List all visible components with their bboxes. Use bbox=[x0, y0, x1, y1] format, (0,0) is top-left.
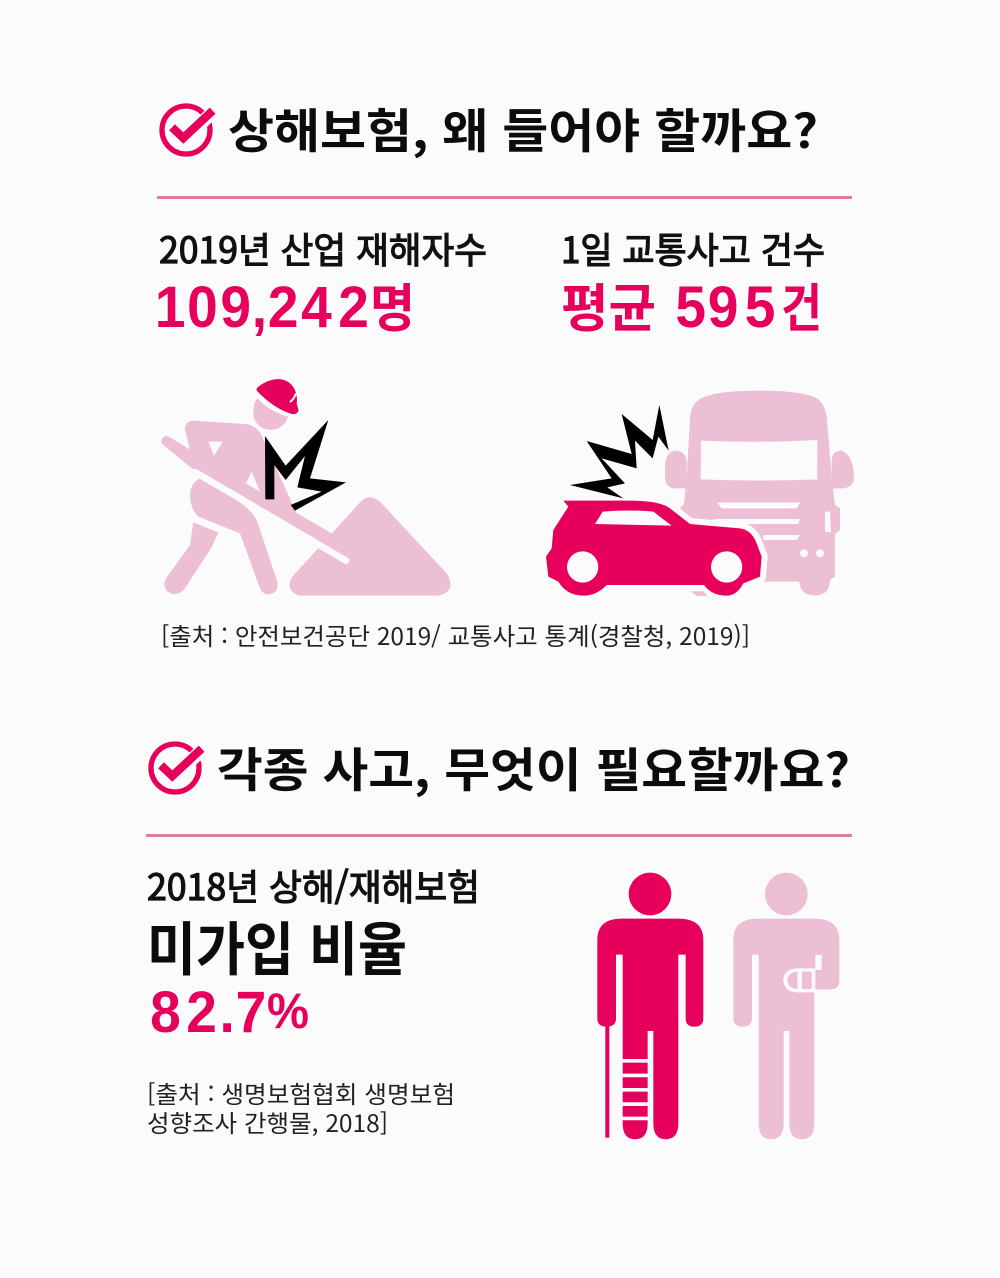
source line 1: [출처 : 생명보험협회 생명보험 bbox=[147, 1075, 455, 1110]
stat label: 2018년 상해/재해보험 bbox=[147, 859, 480, 911]
impact bolt bbox=[570, 405, 669, 498]
head bbox=[765, 873, 808, 915]
stat label: 2019년 산업 재해자수 bbox=[159, 222, 487, 274]
hip and front leg bbox=[190, 479, 278, 594]
divider line bbox=[157, 196, 852, 199]
icon: person with arm cast bbox=[733, 873, 839, 1139]
car bbox=[546, 501, 762, 596]
stat subheading: 미가입 비율 bbox=[147, 903, 407, 987]
section: why accident insurance bbox=[155, 93, 854, 652]
divider line bbox=[146, 834, 852, 837]
heading: 상해보험, 왜 들어야 할까요? bbox=[228, 93, 818, 162]
helmet bbox=[257, 379, 299, 414]
source note bbox=[147, 1075, 455, 1139]
source note: [출처 : 안전보건공단 2019/ 교통사고 통계(경찰청, 2019)] bbox=[161, 617, 750, 652]
stat value: 명 bbox=[370, 267, 415, 342]
icon: car and truck collision bbox=[546, 391, 854, 596]
truck mirrors bbox=[665, 451, 854, 488]
arm cast bbox=[783, 955, 822, 992]
truck body bbox=[680, 391, 840, 596]
crutch bbox=[605, 1026, 609, 1138]
heading: 각종 사고, 무엇이 필요할까요? bbox=[217, 732, 850, 801]
car window bbox=[595, 510, 672, 526]
stat value: % bbox=[267, 983, 309, 1039]
car wheels bbox=[567, 551, 598, 583]
back leg bbox=[164, 522, 218, 594]
torso and arm bbox=[185, 421, 297, 513]
stat value: 평균 bbox=[561, 267, 656, 342]
stat value: 109,242 bbox=[155, 275, 369, 339]
stat: daily traffic accidents bbox=[561, 222, 825, 342]
icon: person with leg cast and crutch bbox=[597, 873, 703, 1139]
truck grille bbox=[690, 503, 831, 540]
body bbox=[597, 919, 703, 1139]
stat value bbox=[561, 267, 822, 342]
stat value: 595 bbox=[675, 275, 775, 339]
shirt holes bbox=[208, 442, 260, 492]
truck lights bbox=[800, 549, 808, 557]
head bbox=[629, 873, 671, 915]
head bbox=[253, 398, 288, 430]
shovel edge bbox=[195, 472, 346, 561]
impact bolt bbox=[265, 420, 346, 511]
icon: check circle bbox=[162, 106, 213, 154]
section: what is needed bbox=[146, 732, 852, 1139]
truck bumper fragment bbox=[691, 591, 707, 596]
stat value: 82.7 bbox=[150, 980, 266, 1044]
pile of dirt bbox=[290, 497, 450, 596]
truck windshield bbox=[701, 440, 817, 480]
shovel bbox=[161, 436, 347, 560]
stat: industrial accident victims bbox=[155, 222, 487, 342]
body bbox=[733, 919, 839, 1139]
stat label: 1일 교통사고 건수 bbox=[561, 222, 825, 274]
leg bandage bbox=[622, 1059, 648, 1120]
source line 2: 성향조사 간행물, 2018] bbox=[147, 1104, 388, 1139]
stat value: 건 bbox=[781, 267, 822, 342]
icon: check circle bbox=[151, 744, 202, 792]
icon: worker with shovel bbox=[161, 379, 450, 596]
